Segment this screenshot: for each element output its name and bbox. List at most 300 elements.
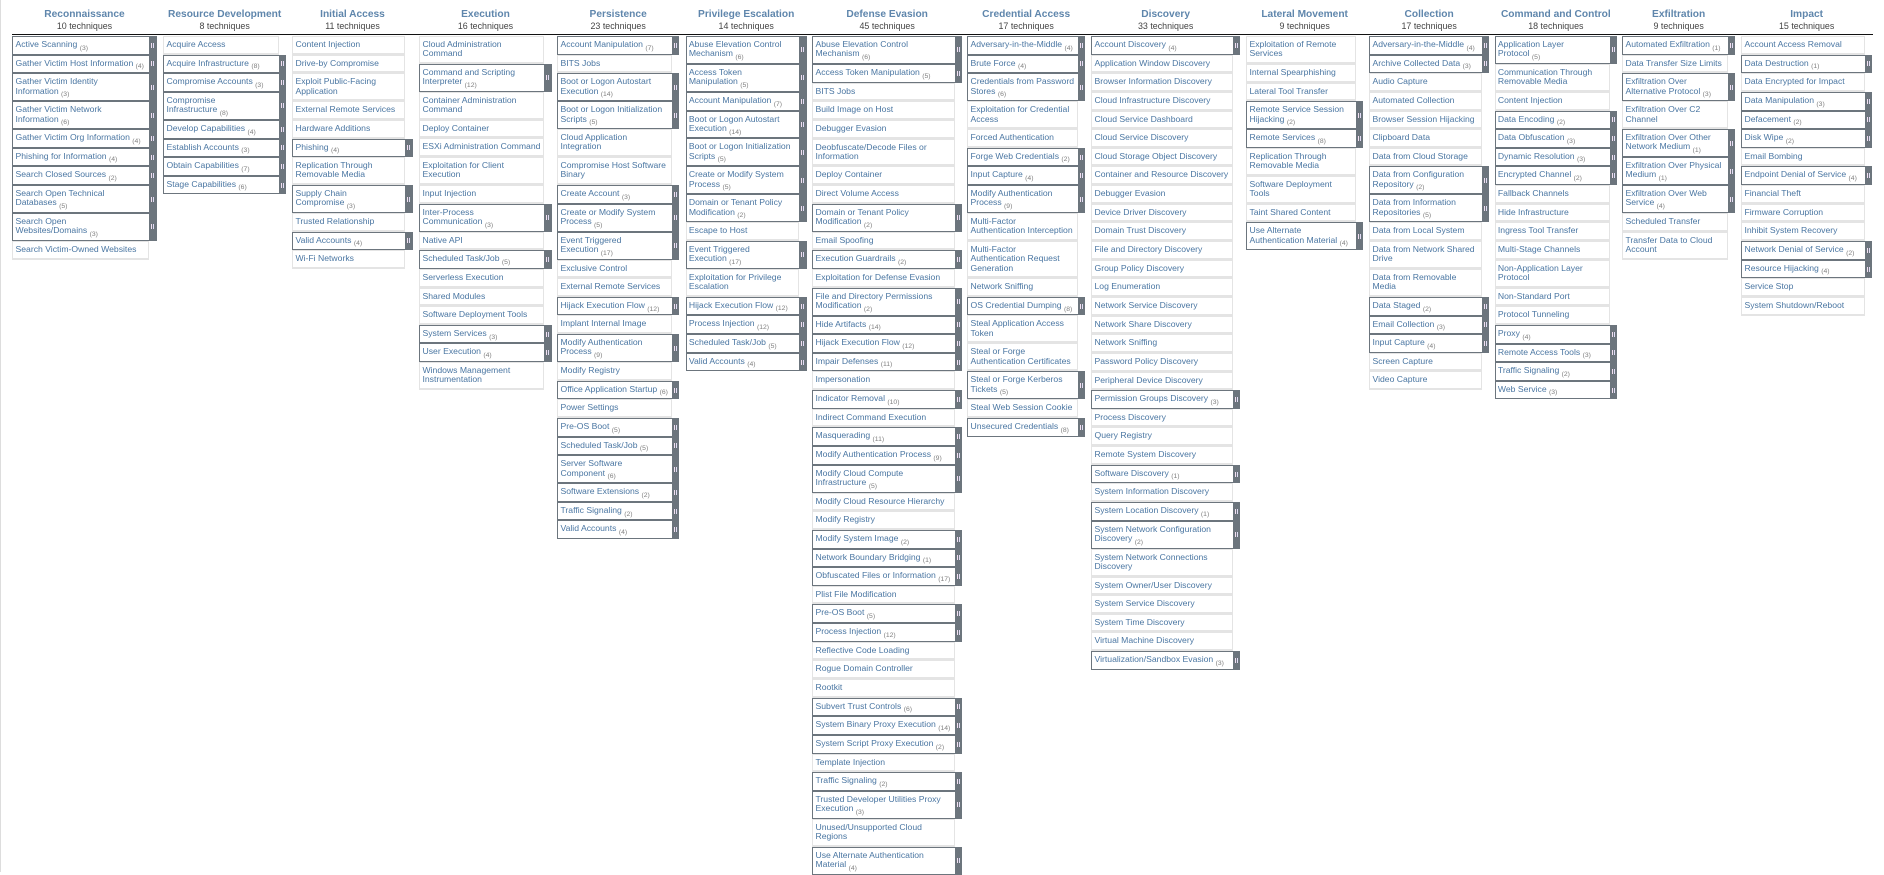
technique: Data from Information Repositories: [1369, 194, 1482, 222]
technique: Create Account: [557, 185, 672, 204]
technique: Modify Cloud Compute Infrastructure: Infrastructure (5): [815, 477, 877, 490]
technique: Inhibit System Recovery: Inhibit System Recovery: [1744, 225, 1837, 235]
technique: Native API: [419, 232, 544, 250]
technique: Data from Removable Media: Media: [1372, 281, 1396, 291]
technique: Communication Through Removable Media: [1495, 64, 1610, 92]
technique: Communication Through Removable Media: Communication Through: [1498, 67, 1592, 77]
technique: Log Enumeration: Log Enumeration: [1094, 281, 1160, 291]
technique: OS Credential Dumping: OS Credential Dumping (8): [970, 300, 1072, 313]
technique: Rootkit: [812, 679, 955, 698]
technique: Native API: Native API: [422, 235, 463, 245]
technique: Remote Service Session Hijacking: Hijacking (2): [1249, 114, 1295, 126]
technique: Windows Management Instrumentation: Windows Management: [422, 365, 510, 375]
technique: Resource Hijacking: Resource Hijacking (4): [1744, 263, 1830, 275]
technique: Acquire Access: Acquire Access: [166, 39, 225, 49]
technique: Video Capture: Video Capture: [1372, 374, 1427, 384]
technique: Steal Application Access Token: Token: [970, 328, 994, 338]
heading: Persistence: 23 techniques: [590, 20, 646, 30]
technique: Credentials from Password Stores: [967, 73, 1078, 101]
technique: Deobfuscate/Decode Files or Information: Deobfuscate/Decode Files or: [815, 142, 927, 152]
technique: Boot or Logon Autostart Execution: [557, 73, 672, 101]
technique: Hide Artifacts: [812, 316, 955, 334]
technique: Audio Capture: Audio Capture: [1372, 76, 1428, 86]
technique: Indicator Removal: [812, 390, 955, 409]
technique: Network Boundary Bridging: Network Boundary Bridging (1): [815, 552, 931, 564]
technique: Scheduled Task/Job: [686, 334, 799, 353]
technique: Data Manipulation: [1741, 92, 1865, 111]
technique: Data Obfuscation: Data Obfuscation (3): [1498, 132, 1575, 145]
technique: Fallback Channels: Fallback Channels: [1498, 188, 1569, 198]
heading: Discovery: [1138, 9, 1193, 31]
technique: Indirect Command Execution: Indirect Command Execution: [815, 412, 926, 422]
technique: Brute Force: [967, 55, 1078, 73]
technique: System Information Discovery: System Information Discovery: [1094, 486, 1209, 496]
technique: OS Credential Dumping: [967, 297, 1078, 315]
technique: Abuse Elevation Control Mechanism: Mechanism (6): [689, 48, 744, 61]
technique: File and Directory Permissions Modification: [812, 288, 955, 316]
technique: Event Triggered Execution: Execution (17): [689, 253, 741, 266]
technique: Inhibit System Recovery: [1741, 222, 1865, 241]
technique: Software Deployment Tools: [419, 306, 544, 325]
technique: Cloud Administration Command: Command: [422, 48, 462, 58]
technique: Software Deployment Tools: Software Deployment Tools: [422, 309, 527, 319]
technique: Clipboard Data: Clipboard Data: [1372, 132, 1430, 142]
technique: Use Alternate Authentication Material: [812, 847, 955, 875]
technique: Data from Cloud Storage: [1369, 148, 1482, 166]
technique: Search Open Technical Databases: Search Open Technical: [15, 188, 105, 198]
technique: Archive Collected Data: Archive Collected Data (3): [1372, 58, 1471, 70]
technique: Windows Management Instrumentation: Instrumentation: [422, 374, 482, 384]
technique: Search Open Websites/Domains: Websites/Domains (3): [15, 225, 98, 238]
technique: Modify Authentication Process: [967, 185, 1078, 213]
technique: Build Image on Host: Build Image on Host: [815, 104, 893, 114]
technique: Acquire Infrastructure: Acquire Infrastructure (8): [166, 58, 260, 70]
technique: Virtualization/Sandbox Evasion: Virtualization/Sandbox Evasion (3): [1094, 654, 1224, 667]
technique: Hijack Execution Flow: Hijack Execution Flow (12): [560, 300, 659, 313]
technique: Supply Chain Compromise: [292, 185, 405, 213]
technique: Firmware Corruption: [1741, 204, 1865, 222]
technique: Archive Collected Data: [1369, 55, 1482, 73]
technique: Masquerading: [812, 427, 955, 446]
technique: Process Injection: Process Injection (12): [815, 626, 896, 639]
technique: Peripheral Device Discovery: [1091, 372, 1233, 390]
technique: Lateral Tool Transfer: Lateral Tool Transfer: [1249, 86, 1328, 96]
technique: Automated Exfiltration: [1622, 36, 1728, 55]
technique: Pre-OS Boot: [557, 418, 672, 437]
heading: Command and Control: Command and Control: [1501, 9, 1611, 20]
technique: Container Administration Command: [419, 92, 544, 120]
technique: Account Discovery: Account Discovery (4): [1094, 39, 1177, 52]
heading: Resource Development: 8 techniques: [199, 20, 250, 30]
technique: Acquire Infrastructure: [163, 55, 279, 73]
technique: Search Victim-Owned Websites: [12, 241, 149, 260]
technique: Modify System Image: [812, 530, 955, 548]
technique: Pre-OS Boot: Pre-OS Boot (5): [815, 607, 875, 620]
technique: Network Share Discovery: [1091, 316, 1233, 334]
technique: External Remote Services: [557, 278, 672, 297]
technique: Steal Application Access Token: Steal Application Access: [970, 318, 1064, 328]
column: Collection: [1369, 9, 1489, 390]
technique: Template Injection: [812, 754, 955, 772]
technique: Network Denial of Service: [1741, 241, 1865, 260]
technique: Account Access Removal: Account Access Removal: [1744, 39, 1842, 49]
technique: Server Software Component: Server Software: [560, 458, 622, 468]
technique: Data Encoding: [1495, 111, 1610, 129]
technique: Active Scanning: [12, 36, 149, 55]
technique: Pre-OS Boot: Pre-OS Boot (5): [560, 421, 620, 434]
technique: Exfiltration Over Physical Medium: Medium (1): [1625, 169, 1667, 182]
technique: Valid Accounts: Valid Accounts (4): [689, 356, 756, 368]
technique: Unsecured Credentials: [967, 418, 1078, 437]
technique: Container Administration Command: Container Administration: [422, 95, 516, 105]
heading: Defense Evasion: [846, 9, 928, 31]
technique: Cloud Storage Object Discovery: Cloud Storage Object Discovery: [1094, 151, 1217, 161]
technique: Adversary-in-the-Middle: [967, 36, 1078, 55]
technique: Remote Access Tools: [1495, 344, 1610, 362]
heading: Command and Control: 18 techniques: [1528, 20, 1583, 30]
technique: Modify Cloud Resource Hierarchy: [812, 493, 955, 511]
technique: Exfiltration Over Web Service: [1622, 185, 1728, 213]
technique: Process Discovery: [1091, 409, 1233, 427]
technique: Automated Exfiltration: Automated Exfiltration (1): [1625, 39, 1721, 52]
technique: Replication Through Removable Media: Replication Through: [1249, 151, 1327, 161]
technique: Non-Application Layer Protocol: Non-Application Layer: [1498, 263, 1583, 273]
technique: Boot or Logon Initialization Scripts: Boot or Logon Initialization: [560, 104, 662, 114]
technique: Implant Internal Image: Implant Internal Image: [560, 318, 646, 328]
technique: System Services: System Services (3): [422, 328, 497, 340]
technique: Process Injection: [812, 623, 955, 642]
technique: Replication Through Removable Media: Removable Media: [1249, 160, 1319, 170]
heading: Execution: Execution: [461, 9, 510, 20]
technique: Reflective Code Loading: [812, 642, 955, 660]
technique: System Location Discovery: [1091, 502, 1233, 521]
technique: Software Discovery: [1091, 465, 1233, 483]
technique: Non-Application Layer Protocol: [1495, 260, 1610, 288]
heading: Reconnaissance: 10 techniques: [57, 20, 112, 30]
technique: Ingress Tool Transfer: [1495, 222, 1610, 241]
technique: Communication Through Removable Media: Removable Media: [1498, 76, 1567, 86]
technique: Adversary-in-the-Middle: Adversary-in-the-Middle (4): [1372, 39, 1475, 52]
technique: Event Triggered Execution: [686, 241, 799, 269]
technique: Email Collection: Email Collection (3): [1372, 319, 1445, 331]
technique: Gather Victim Identity Information: Gather Victim Identity: [15, 76, 98, 86]
technique: Transfer Data to Cloud Account: Account: [1625, 244, 1657, 254]
heading: Initial Access: Initial Access: [320, 9, 385, 20]
technique: Supply Chain Compromise: Compromise (3): [295, 197, 355, 210]
technique: Scheduled Task/Job: Scheduled Task/Job (5): [689, 337, 777, 350]
technique: Drive-by Compromise: [292, 55, 405, 73]
column: Impact: [1741, 9, 1872, 316]
technique: BITS Jobs: BITS Jobs: [560, 58, 600, 68]
technique: Email Collection: [1369, 316, 1482, 334]
technique: Boot or Logon Initialization Scripts: Scripts (5): [689, 151, 726, 163]
technique: Windows Management Instrumentation: [419, 362, 544, 390]
technique: Query Registry: Query Registry: [1094, 430, 1152, 440]
technique: System Network Connections Discovery: System Network Connections: [1094, 552, 1208, 562]
technique: Plist File Modification: [812, 586, 955, 604]
technique: Compromise Infrastructure: Infrastructure (8): [166, 104, 228, 117]
column: Exfiltration: [1622, 9, 1735, 260]
technique: Hijack Execution Flow: [812, 334, 955, 353]
technique: System Network Connections Discovery: Discovery: [1094, 561, 1132, 571]
technique: Debugger Evasion: Debugger Evasion: [815, 123, 886, 133]
technique: Proxy: [1495, 325, 1610, 344]
technique: Permission Groups Discovery: [1091, 390, 1233, 409]
technique: Forge Web Credentials: [967, 148, 1078, 166]
technique: Drive-by Compromise: Drive-by Compromise: [295, 58, 379, 68]
column: Execution: [419, 9, 552, 390]
technique: Software Deployment Tools: [1246, 176, 1356, 204]
heading: Collection: Collection: [1405, 9, 1454, 20]
technique: Deobfuscate/Decode Files or Information: [812, 138, 955, 166]
technique: Valid Accounts: [292, 232, 405, 250]
technique: Debugger Evasion: [1091, 185, 1233, 204]
technique: Create or Modify System Process: [686, 166, 799, 194]
technique: Hide Artifacts: Hide Artifacts (14): [815, 319, 881, 331]
technique: Container Administration Command: Command: [422, 104, 462, 114]
technique: Replication Through Removable Media: Replication Through: [295, 160, 373, 170]
technique: Application Layer Protocol: [1495, 36, 1610, 64]
technique: Obfuscated Files or Information: [812, 567, 955, 586]
technique: Exploitation of Remote Services: Services: [1249, 48, 1283, 58]
technique: Data Staged: [1369, 297, 1482, 316]
technique: Exploitation of Remote Services: Exploitation of Remote: [1249, 39, 1336, 49]
technique: Email Bombing: [1741, 148, 1865, 166]
technique: Credentials from Password Stores: Stores (6): [970, 86, 1006, 98]
technique: Compromise Infrastructure: [163, 92, 279, 120]
technique: Inter-Process Communication: [419, 204, 544, 232]
technique: Application Window Discovery: Application Window Discovery: [1094, 58, 1210, 68]
heading: Credential Access: [982, 9, 1070, 31]
technique: File and Directory Permissions Modification: File and Directory Permissions: [815, 291, 932, 301]
technique: Data Encrypted for Impact: [1741, 73, 1865, 92]
technique: Content Injection: Content Injection: [1498, 95, 1563, 105]
heading: Reconnaissance: Reconnaissance: [44, 9, 125, 20]
technique: Application Window Discovery: [1091, 55, 1233, 73]
technique: Resource Hijacking: [1741, 260, 1865, 278]
technique: System Network Configuration Discovery: System Network Configuration: [1094, 524, 1211, 534]
technique: Transfer Data to Cloud Account: [1622, 232, 1728, 260]
technique: Application Layer Protocol: Protocol (5): [1498, 48, 1540, 61]
technique: Exploitation for Defense Evasion: Exploitation for Defense Evasion: [815, 272, 940, 282]
technique: Dynamic Resolution: Dynamic Resolution (3): [1498, 151, 1585, 163]
technique: Abuse Elevation Control Mechanism: Mechanism (6): [815, 48, 870, 61]
technique: Data Encoding: Data Encoding (2): [1498, 114, 1565, 126]
technique: Hijack Execution Flow: [557, 297, 672, 315]
technique: Data Transfer Size Limits: [1622, 55, 1728, 73]
technique: Brute Force: Brute Force (4): [970, 58, 1026, 70]
technique: Exfiltration Over Other Network Medium: Exfiltration Over Other: [1625, 132, 1711, 142]
technique: System Shutdown/Reboot: System Shutdown/Reboot: [1744, 300, 1844, 310]
technique: Server Software Component: Component (6): [560, 468, 616, 480]
technique: Steal or Forge Kerberos Tickets: Tickets (5): [970, 384, 1008, 396]
technique: Data from Configuration Repository: [1369, 166, 1482, 194]
column: Persistence: [557, 9, 679, 539]
technique: Deploy Container: [419, 120, 544, 138]
technique: Exfiltration Over Alternative Protocol: Exfiltration Over: [1625, 76, 1687, 86]
technique: Boot or Logon Initialization Scripts: Boot or Logon Initialization: [689, 141, 791, 151]
technique: Password Policy Discovery: [1091, 353, 1233, 372]
technique: Account Discovery: [1091, 36, 1233, 55]
technique: Device Driver Discovery: [1091, 204, 1233, 222]
technique: Valid Accounts: [686, 353, 799, 371]
technique: Remote Service Session Hijacking: [1246, 101, 1356, 129]
technique: Data from Cloud Storage: Data from Cloud Storage: [1372, 151, 1468, 161]
technique: Lateral Tool Transfer: [1246, 83, 1356, 101]
technique: Data from Removable Media: Data from Removable: [1372, 272, 1456, 282]
technique: System Time Discovery: [1091, 614, 1233, 632]
technique: Wi-Fi Networks: [292, 250, 405, 269]
technique: Replication Through Removable Media: [292, 157, 405, 185]
technique: Exploitation for Privilege Escalation: Escalation: [689, 281, 729, 291]
technique: Valid Accounts: Valid Accounts (4): [560, 523, 627, 536]
heading: Resource Development: [168, 9, 282, 31]
technique: Use Alternate Authentication Material: Use Alternate Authentication: [815, 850, 924, 860]
technique: Browser Information Discovery: Browser Information Discovery: [1094, 76, 1212, 86]
technique: Automated Collection: [1369, 92, 1482, 111]
technique: Scheduled Transfer: Scheduled Transfer: [1625, 216, 1700, 226]
technique: Data from Network Shared Drive: [1369, 241, 1482, 269]
technique: Compromise Host Software Binary: Compromise Host Software: [560, 160, 666, 170]
technique: Phishing for Information: Phishing for Information (4): [15, 151, 117, 163]
technique: Exfiltration Over Web Service: Exfiltration Over Web: [1625, 188, 1707, 198]
technique: Cloud Application Integration: Integration: [560, 141, 601, 151]
technique: Unused/Unsupported Cloud Regions: Unused/Unsupported Cloud: [815, 822, 922, 832]
technique: BITS Jobs: [812, 83, 955, 101]
technique: Screen Capture: [1369, 353, 1482, 371]
technique: Internal Spearphishing: [1246, 64, 1356, 83]
technique: Access Token Manipulation: [686, 64, 799, 92]
technique: Obfuscated Files or Information: Obfuscated Files or Information (17): [815, 570, 950, 583]
technique: ESXi Administration Command: [419, 138, 544, 157]
technique: Device Driver Discovery: Device Driver Discovery: [1094, 207, 1186, 217]
technique: Use Alternate Authentication Material: Authentication Material (4): [1249, 235, 1348, 247]
technique: Multi-Factor Authentication Request Generation: Multi-Factor: [970, 244, 1016, 254]
technique: Domain or Tenant Policy Modification: [812, 204, 955, 232]
technique: Cloud Infrastructure Discovery: [1091, 92, 1233, 111]
technique: Execution Guardrails: Execution Guardrails (2): [815, 253, 906, 266]
technique: Modify Registry: Modify Registry: [560, 365, 620, 375]
heading: Impact: 15 techniques: [1779, 20, 1834, 30]
heading: Exfiltration: Exfiltration: [1652, 9, 1705, 20]
technique: Command and Scripting Interpreter: Interpreter (12): [422, 76, 477, 89]
technique: Access Token Manipulation: Manipulation (5): [689, 76, 748, 89]
technique: Deploy Container: [812, 166, 955, 185]
technique: Steal or Forge Kerberos Tickets: Steal or Forge Kerberos: [970, 374, 1063, 384]
technique: Boot or Logon Initialization Scripts: [557, 101, 672, 129]
technique: Impersonation: [812, 371, 955, 390]
technique: Network Share Discovery: Network Share Discovery: [1094, 319, 1192, 329]
technique: Scheduled Task/Job: Scheduled Task/Job (5): [422, 253, 510, 266]
technique: Exploitation for Client Execution: Execution: [422, 169, 460, 179]
heading: Execution: 16 techniques: [458, 20, 513, 30]
technique: Exploitation for Credential Access: [967, 101, 1078, 129]
technique: Exploit Public-Facing Application: Application: [295, 86, 338, 96]
technique: Exfiltration Over Other Network Medium: [1622, 129, 1728, 157]
technique: Event Triggered Execution: [557, 232, 672, 260]
technique: System Service Discovery: [1091, 595, 1233, 614]
technique: Establish Accounts: Establish Accounts (3): [166, 142, 250, 154]
heading: Exfiltration: 9 techniques: [1653, 20, 1704, 30]
technique: Compromise Accounts: Compromise Accounts (3): [166, 76, 263, 89]
technique: Trusted Developer Utilities Proxy Execution: Execution (3): [815, 803, 864, 816]
technique: System Binary Proxy Execution: System Binary Proxy Execution (14): [815, 719, 950, 732]
technique: Network Sniffing: [967, 278, 1078, 297]
technique: Phishing: Phishing (4): [295, 142, 339, 154]
heading: Lateral Movement: Lateral Movement: [1261, 9, 1348, 20]
technique: Multi-Stage Channels: Multi-Stage Channels: [1498, 244, 1580, 254]
technique: Abuse Elevation Control Mechanism: [686, 36, 799, 64]
technique: Exploit Public-Facing Application: [292, 73, 405, 101]
technique: Taint Shared Content: [1246, 204, 1356, 222]
technique: External Remote Services: [292, 101, 405, 120]
technique: Exfiltration Over Alternative Protocol: [1622, 73, 1728, 101]
technique: Steal Application Access Token: [967, 315, 1078, 343]
technique: Gather Victim Network Information: Gather Victim Network: [15, 104, 102, 114]
technique: Modify Cloud Resource Hierarchy: Modify Cloud Resource Hierarchy: [815, 496, 944, 506]
technique: Input Injection: Input Injection: [422, 188, 476, 198]
technique: Unsecured Credentials: Unsecured Credentials (8): [970, 421, 1069, 434]
heading: Defense Evasion: Defense Evasion: [846, 9, 928, 20]
technique: Modify Authentication Process: Process (9): [560, 346, 602, 359]
column: Discovery: [1091, 9, 1240, 670]
technique: Compromise Host Software Binary: Binary: [560, 169, 585, 179]
technique: Adversary-in-the-Middle: [1369, 36, 1482, 55]
technique: Non-Application Layer Protocol: Protocol: [1498, 272, 1530, 282]
technique: System Time Discovery: System Time Discovery: [1094, 617, 1185, 627]
technique: Network Boundary Bridging: [812, 548, 955, 567]
technique: Account Manipulation: [557, 36, 672, 55]
technique: Data from Network Shared Drive: Data from Network Shared: [1372, 244, 1475, 254]
technique: Dynamic Resolution: [1495, 148, 1610, 166]
technique: Traffic Signaling: Traffic Signaling (2): [815, 775, 888, 788]
technique: Trusted Developer Utilities Proxy Execution: [812, 791, 955, 819]
technique: Input Capture: [967, 166, 1078, 185]
technique: Compromise Accounts: [163, 73, 279, 92]
technique: Gather Victim Identity Information: Information (3): [15, 86, 69, 98]
heading: Persistence: [590, 9, 647, 31]
technique: Remote Service Session Hijacking: Remote Service Session: [1249, 104, 1344, 114]
technique: Replication Through Removable Media: Removable Media: [295, 169, 365, 179]
technique: Direct Volume Access: Direct Volume Access: [815, 188, 899, 198]
technique: Develop Capabilities: Develop Capabilities (4): [166, 123, 256, 136]
technique: Exfiltration Over C2 Channel: Exfiltration Over C2: [1625, 104, 1700, 114]
technique: File and Directory Discovery: File and Directory Discovery: [1094, 244, 1202, 254]
technique: Cloud Service Discovery: Cloud Service Discovery: [1094, 132, 1188, 142]
technique: Scheduled Task/Job: Scheduled Task/Job (5): [560, 440, 648, 452]
technique: Impair Defenses: [812, 353, 955, 371]
technique: Forge Web Credentials: Forge Web Credentials (2): [970, 151, 1070, 163]
technique: Exfiltration Over C2 Channel: Channel: [1625, 114, 1658, 124]
technique: Gather Victim Host Information: Gather Victim Host Information (4): [15, 58, 144, 70]
technique: Impersonation: Impersonation: [815, 374, 870, 384]
technique: Domain or Tenant Policy Modification: Modification (2): [689, 207, 746, 219]
technique: Forced Authentication: [967, 129, 1078, 148]
technique: Multi-Factor Authentication Request Generation: [967, 241, 1078, 278]
technique: Process Injection: [686, 315, 799, 334]
technique: Multi-Factor Authentication Request Generation: Authentication Request: [970, 253, 1060, 263]
technique: Firmware Corruption: Firmware Corruption: [1744, 207, 1823, 217]
technique: Forced Authentication: Forced Authentication: [970, 132, 1054, 142]
technique: Exploitation for Credential Access: Exploitation for Credential: [970, 104, 1069, 114]
technique: Deploy Container: Deploy Container: [815, 169, 882, 179]
heading: Discovery: Discovery: [1141, 9, 1190, 20]
technique: Inter-Process Communication: Inter-Process: [422, 207, 474, 217]
technique: Obtain Capabilities: Obtain Capabilities (7): [166, 160, 250, 173]
technique: Data Destruction: Data Destruction (1): [1744, 58, 1819, 70]
technique: Content Injection: Content Injection: [295, 39, 360, 49]
technique: Valid Accounts: [557, 520, 672, 539]
